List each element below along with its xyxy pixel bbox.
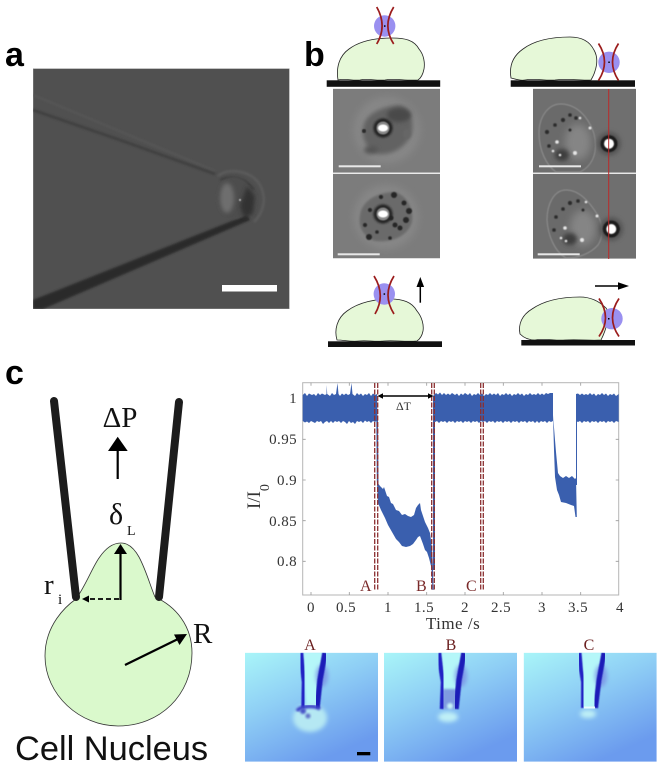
- x tick labels: 2.5: [491, 600, 511, 616]
- x tick labels: 3.5: [568, 600, 588, 616]
- nucleus shape: [45, 543, 192, 726]
- chart: normalized current over time: [244, 383, 624, 633]
- schematic: cell pulled up with arrow: [328, 276, 442, 347]
- schematic: cell pushed sideways with arrow: [520, 282, 635, 346]
- panel label c: c: [5, 354, 24, 392]
- data: first event dip: [376, 418, 434, 590]
- marker labels: C: [466, 578, 477, 595]
- scale bars left micrographs: [338, 165, 381, 255]
- x tick labels: [307, 600, 624, 616]
- x axis title: Time /s: [426, 614, 480, 633]
- micrograph: bead over cell, top: [333, 89, 440, 173]
- axis ticks: [303, 383, 619, 595]
- x tick labels: 0: [307, 600, 315, 616]
- frame label C: C: [584, 637, 594, 654]
- pressure arrow: [108, 437, 128, 479]
- pressure label: ΔP: [103, 402, 137, 434]
- image C: empty pipette: [524, 652, 657, 762]
- delta T label: ΔT: [396, 399, 412, 413]
- panel a: micrograph of pipette and cell: [33, 68, 290, 309]
- schematic: cell with bead on top: [327, 7, 440, 87]
- micrograph: bead beside cell, top: [533, 89, 636, 173]
- plot frame: [303, 383, 619, 595]
- x tick labels: 1: [384, 600, 392, 616]
- R label: R: [193, 618, 213, 650]
- marker labels: B: [416, 578, 427, 595]
- y axis title: I/I: [244, 491, 265, 509]
- marker labels: A: [360, 578, 372, 595]
- delta L arrow: [114, 544, 127, 600]
- y tick labels: 0.9: [277, 473, 297, 489]
- data: baseline trace first segment: [303, 383, 378, 424]
- panel label b: b: [304, 36, 325, 74]
- red reference line: [608, 89, 609, 259]
- data: second event recovery: [576, 395, 577, 485]
- micrograph: bead touching cell, bottom: [533, 174, 636, 259]
- image B: pipette with partly aspirated nucleus: [384, 652, 517, 762]
- frame label A: A: [304, 637, 316, 654]
- y tick labels: 0.85: [269, 514, 297, 530]
- scale bar c: [357, 752, 370, 755]
- micrograph: bead over cell, bottom: [333, 174, 440, 259]
- diagram: nucleus aspirated into micropipette: [44, 401, 213, 726]
- y tick labels: 0.95: [269, 432, 297, 448]
- r_i label: r: [44, 569, 54, 601]
- data: baseline trace second segment: [433, 392, 553, 423]
- data: baseline trace third segment: [576, 393, 619, 423]
- scale bars right micrographs: [538, 165, 581, 255]
- caption: Cell Nucleus: Cell Nucleus: [15, 730, 208, 768]
- y axis title: 0: [258, 484, 273, 491]
- x tick labels: 2: [461, 600, 469, 616]
- x tick labels: 1.5: [414, 600, 434, 616]
- delta T arrow: [378, 393, 434, 399]
- radius dashed arrow: [82, 596, 119, 602]
- panel label a: a: [5, 36, 25, 74]
- data: first event recovery: [433, 400, 435, 570]
- diagram: nucleus aspirated into micropipette: L: [127, 524, 136, 539]
- frame label B: B: [446, 637, 456, 654]
- data: second event dip: [553, 415, 577, 517]
- marker labels: [360, 578, 477, 595]
- image A: pipette with nucleus: [245, 652, 378, 762]
- schematic: cell with bead at side: [510, 37, 635, 87]
- marker lines A B C: [375, 383, 483, 591]
- R arrow: [125, 634, 187, 665]
- y tick labels: 0.8: [277, 554, 297, 570]
- y tick labels: [269, 391, 297, 570]
- x tick labels: 0.5: [336, 600, 356, 616]
- pipette walls: [54, 401, 179, 597]
- diagram: nucleus aspirated into micropipette: i: [58, 592, 62, 608]
- delta L label: δ: [109, 498, 123, 531]
- y tick labels: 1: [289, 391, 297, 407]
- scale bar a: [222, 285, 277, 292]
- x tick labels: 4: [616, 600, 624, 616]
- x tick labels: 3: [538, 600, 546, 616]
